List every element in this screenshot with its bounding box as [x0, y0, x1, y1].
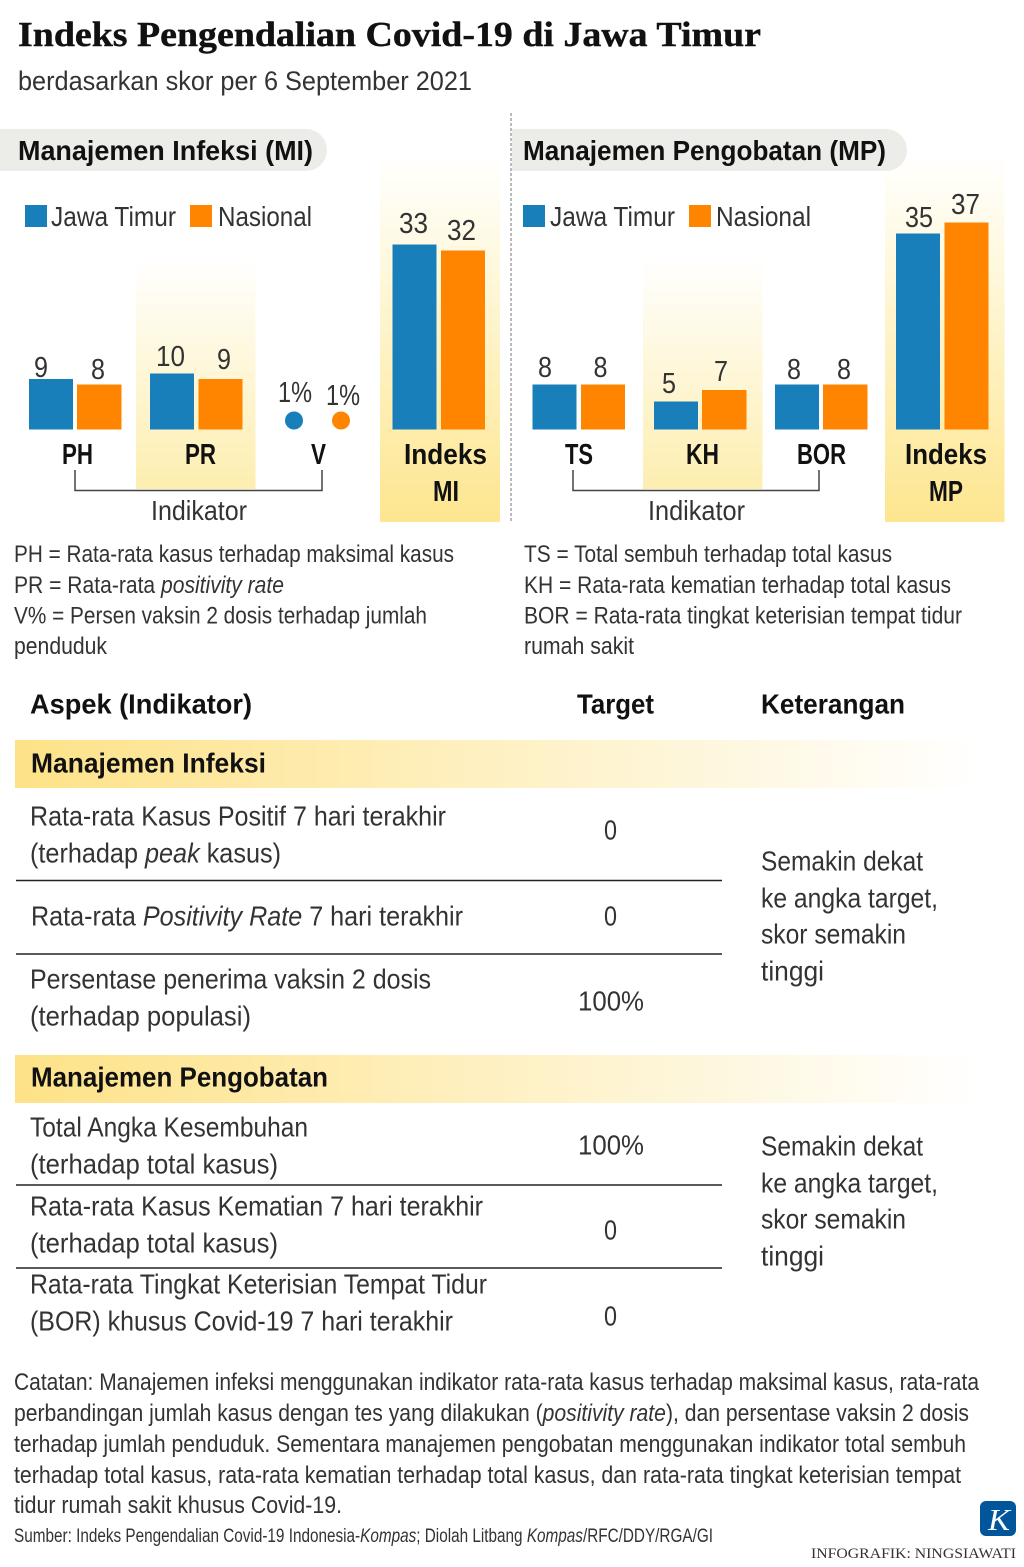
heading pill: Manajemen Pengobatan: Manajemen Pengobatan (MP) — [523, 135, 886, 166]
bars: KH — [654, 356, 746, 471]
keterangan: pengobatan — [761, 1130, 938, 1271]
dots: V: 1% — [326, 380, 360, 412]
row: positivity rate: 0 — [604, 900, 617, 931]
section band: Manajemen Pengobatan — [15, 1055, 980, 1103]
definitions: infection indicators: PR = Rata-rata positivity rate — [14, 572, 284, 599]
bars: TS: 8 — [594, 352, 608, 384]
legend: Nasional — [716, 201, 811, 232]
dots: V: 1% — [278, 377, 312, 409]
source: Sumber: Indeks Pengendalian Covid-19 Indonesia-Kompas; Diolah Litbang Kompas/RFC/DDY/RGA/GI — [14, 1526, 713, 1547]
section band: Manajemen Pengobatan: Manajemen Pengobatan — [31, 1061, 328, 1092]
highlight column: KH — [643, 258, 762, 489]
row: kasus positif: 0 — [604, 814, 617, 845]
bars: PR: 9 — [217, 344, 231, 376]
definitions: infection indicators: V% = Persen vaksin 2 dosis terhadap jumlah — [14, 602, 427, 630]
note text: tidur rumah sakit khusus Covid-19. — [14, 1492, 342, 1519]
bars: Indeks MP: 35 — [905, 202, 933, 234]
keterangan: infeksi: tinggi — [761, 955, 824, 986]
highlight column: Indeks MI — [380, 150, 500, 522]
bars: PH: 9 — [34, 352, 48, 384]
definitions: treatment indicators: BOR = Rata-rata tingkat keterisian tempat tidur — [524, 602, 962, 630]
table header: Target — [577, 688, 654, 719]
row: vaksin: 100% — [578, 985, 644, 1016]
bars: BOR: 8 — [837, 354, 851, 386]
keterangan: infeksi: ke angka target, — [761, 882, 938, 913]
subtitle: berdasarkan skor per 6 September 2021 — [18, 66, 472, 96]
highlight column: Indeks MP — [885, 150, 1004, 522]
bars: KH: 5 — [662, 368, 676, 400]
table header: Aspek (Indikator) — [30, 688, 252, 719]
definitions: treatment indicators — [524, 541, 962, 660]
credit: INFOGRAFIK: NINGSIAWATI — [811, 1546, 1016, 1562]
legend: Nasional — [218, 201, 312, 232]
table — [15, 688, 980, 1336]
row: kasus positif: (terhadap peak kasus) — [30, 837, 281, 868]
bars: PR: PR — [185, 439, 216, 471]
row: kesembuhan: 100% — [578, 1129, 644, 1160]
bars: KH: KH — [686, 439, 719, 471]
section band: Manajemen Infeksi — [15, 740, 980, 788]
keterangan: pengobatan: ke angka target, — [761, 1167, 938, 1198]
heading pill: Manajemen Infeksi: Manajemen Infeksi (MI) — [18, 135, 313, 166]
section band: Manajemen Infeksi: Manajemen Infeksi — [31, 747, 266, 778]
row: kematian: Rata-rata Kasus Kematian 7 hari terakhir — [30, 1190, 483, 1221]
bars: Indeks MI — [392, 208, 487, 508]
row: vaksin: Persentase penerima vaksin 2 dosis — [30, 963, 431, 994]
definitions: treatment indicators: rumah sakit — [524, 633, 634, 660]
keterangan: pengobatan: tinggi — [761, 1240, 824, 1271]
panel: Manajemen Pengobatan chart — [512, 129, 1004, 526]
row: kematian — [30, 1190, 617, 1258]
definitions: treatment indicators: TS = Total sembuh terhadap total kasus — [524, 541, 892, 568]
row: BOR — [30, 1268, 617, 1336]
bars: Indeks MI: MI — [433, 476, 459, 508]
row: vaksin — [30, 963, 644, 1031]
bars: PH: 8 — [91, 354, 105, 386]
bars: Indeks MP: MP — [929, 476, 963, 508]
icon: Kompas logo — [980, 1501, 1016, 1537]
bars: PR: 10 — [156, 341, 185, 373]
row: BOR: (BOR) khusus Covid-19 7 hari terakhir — [30, 1305, 453, 1336]
indikator bracket: Indikator — [151, 495, 247, 526]
bars: BOR — [775, 354, 868, 471]
keterangan: infeksi: Semakin dekat — [761, 845, 923, 876]
panel: Manajemen Infeksi chart — [0, 129, 500, 526]
dots: V — [278, 377, 360, 471]
table header: Keterangan — [761, 688, 905, 719]
icon: Kompas logo: K — [987, 1502, 1012, 1537]
row: kesembuhan — [30, 1111, 644, 1179]
legend: Jawa Timur — [51, 201, 176, 232]
bars: TS — [532, 352, 625, 471]
definitions: infection indicators: PH = Rata-rata kasus terhadap maksimal kasus — [14, 541, 454, 568]
row: kasus positif — [30, 800, 617, 868]
bars: Indeks MI: Indeks — [404, 439, 487, 471]
bars: Indeks MI: 33 — [399, 208, 428, 240]
bars: PH — [29, 352, 122, 471]
indikator bracket — [573, 470, 819, 526]
bars: BOR: 8 — [787, 354, 801, 386]
row: BOR: 0 — [604, 1300, 617, 1331]
heading pill: Manajemen Infeksi — [0, 129, 327, 171]
title: Indeks Pengendalian Covid-19 di Jawa Timur — [18, 15, 761, 54]
row: kasus positif: Rata-rata Kasus Positif 7 hari terakhir — [30, 800, 446, 831]
definitions: infection indicators — [14, 541, 454, 660]
table header — [30, 688, 905, 719]
legend — [523, 201, 811, 232]
row: kematian: 0 — [604, 1214, 617, 1245]
row: BOR: Rata-rata Tingkat Keterisian Tempat Tidur — [30, 1268, 487, 1299]
legend — [25, 201, 312, 232]
legend: Jawa Timur — [550, 201, 675, 232]
note text: perbandingan jumlah kasus dengan tes yang dilakukan (positivity rate), dan persentase vaksin 2 dosis — [14, 1400, 969, 1427]
note text — [14, 1369, 980, 1519]
row: kesembuhan: Total Angka Kesembuhan — [30, 1111, 308, 1142]
bars: Indeks MP: Indeks — [905, 439, 987, 471]
keterangan: pengobatan: Semakin dekat — [761, 1130, 923, 1161]
dots: V: V — [311, 439, 327, 471]
bars: PR — [150, 341, 242, 471]
indikator bracket: Indikator — [648, 495, 745, 526]
bars: TS: TS — [565, 439, 593, 471]
row: kesembuhan: (terhadap total kasus) — [30, 1148, 278, 1179]
bars: Indeks MP — [896, 189, 988, 508]
bars: Indeks MP: 37 — [951, 189, 980, 221]
row: positivity rate: Rata-rata Positivity Rate 7 hari terakhir — [31, 900, 463, 931]
keterangan: infeksi: skor semakin — [761, 918, 906, 949]
indikator bracket — [75, 470, 322, 526]
definitions: treatment indicators: KH = Rata-rata kematian terhadap total kasus — [524, 572, 951, 599]
definitions: infection indicators: penduduk — [14, 633, 108, 660]
row: vaksin: (terhadap populasi) — [30, 1000, 251, 1031]
bars: Indeks MI: 32 — [447, 215, 476, 247]
row: kematian: (terhadap total kasus) — [30, 1227, 278, 1258]
bars: KH: 7 — [714, 356, 728, 388]
highlight column: PR — [136, 258, 256, 489]
keterangan: pengobatan: skor semakin — [761, 1203, 906, 1234]
bars: PH: PH — [62, 439, 93, 471]
bars: TS: 8 — [538, 352, 552, 384]
bars: BOR: BOR — [797, 439, 846, 471]
keterangan: infeksi — [761, 845, 938, 986]
